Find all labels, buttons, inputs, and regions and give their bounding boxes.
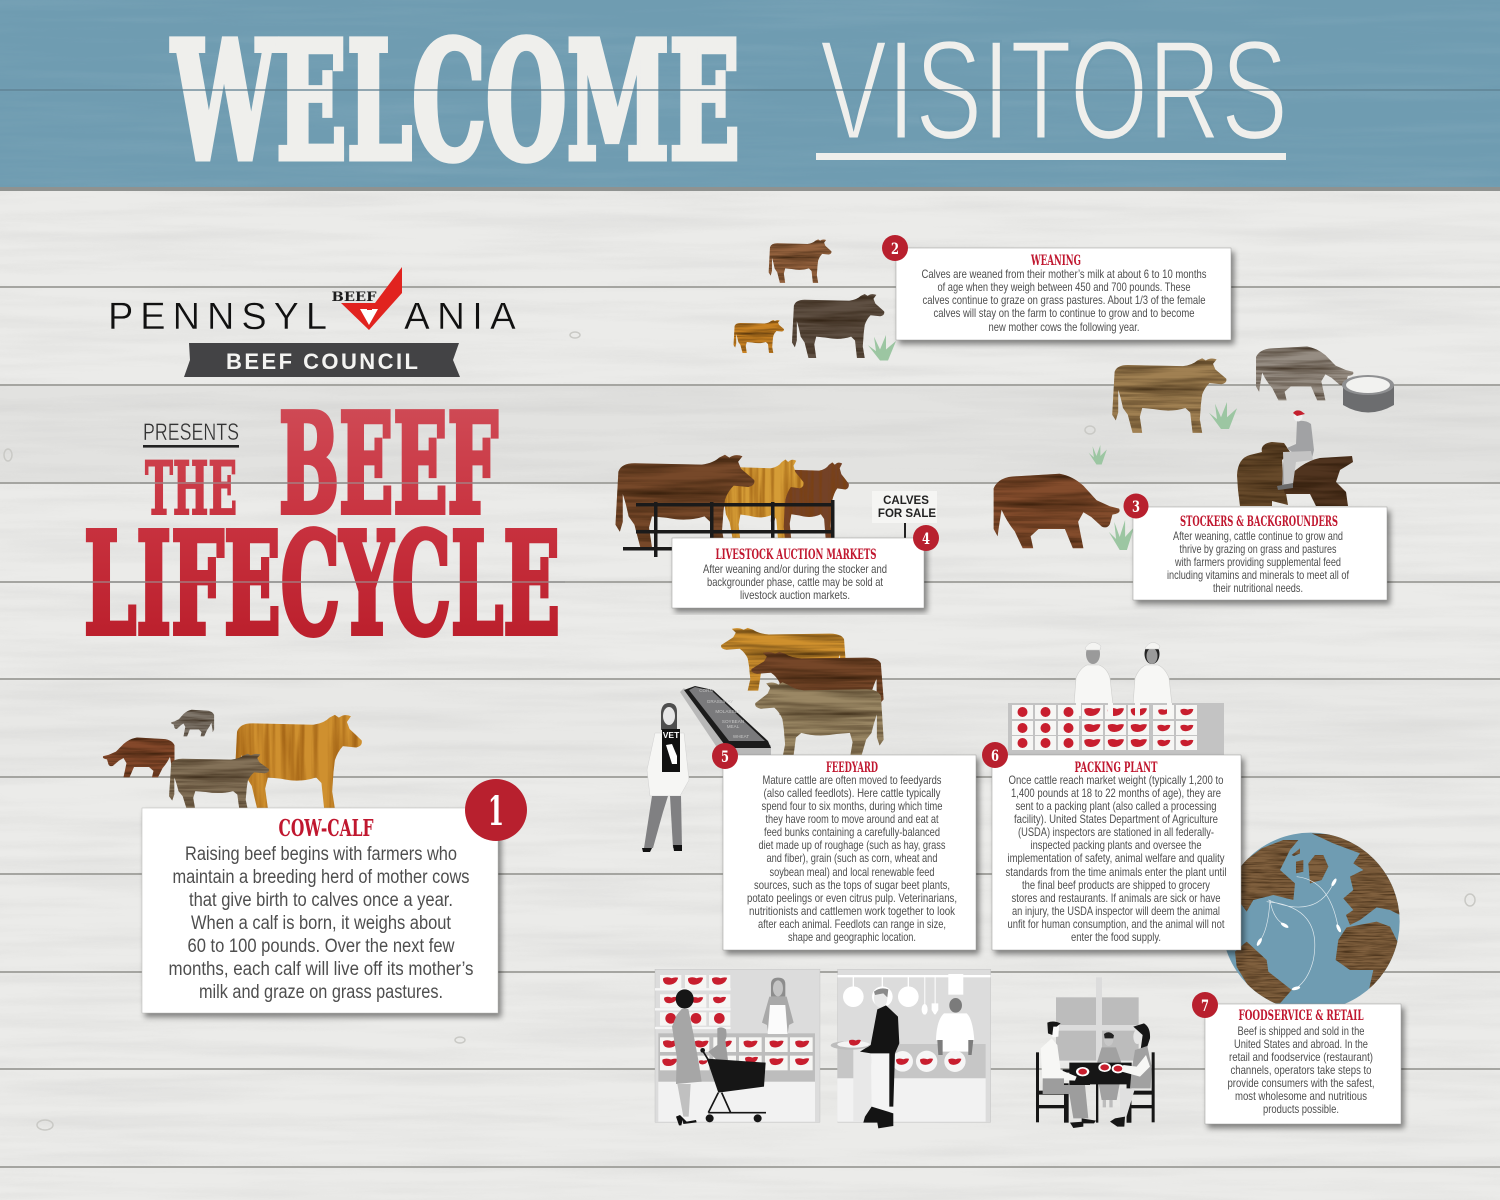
cow: big brown <box>615 455 754 547</box>
text: packing plant: inspected packing plants and oversee the <box>1030 839 1202 852</box>
text: feedyard: shape and geographic location. <box>788 931 916 944</box>
window <box>1056 977 1139 1061</box>
text: cow-calf: that give birth to calves once a year. <box>189 890 453 911</box>
text: packing plant <box>1006 774 1226 944</box>
text: Presents: PRESENTS <box>143 419 239 446</box>
panel: packing plant <box>992 755 1241 950</box>
text: stockers: including vitamins and minerals to meet all of <box>1167 569 1350 582</box>
beef cuts grid <box>1012 705 1197 750</box>
text: auction <box>703 563 887 602</box>
underline <box>816 153 1286 160</box>
plates <box>1076 1063 1124 1076</box>
heading: weaning: WEANING <box>1030 253 1081 269</box>
heading: LIFECYCLE: LIFECYCLE <box>84 503 560 667</box>
panel: weaning <box>896 248 1231 340</box>
text: cow-calf: maintain a breeding herd of mother cows <box>172 867 470 888</box>
text: feedyard: after each animal. Feedlots can range in size, <box>758 918 946 931</box>
steak cards <box>660 975 813 1070</box>
number badge 6 <box>982 742 1008 768</box>
icon: red beef check mark <box>332 267 402 330</box>
cattle group: feedyard <box>642 628 884 852</box>
text: foodservice: products possible. <box>1263 1103 1339 1116</box>
blue header band <box>0 0 1500 191</box>
number badge 4 <box>913 525 939 551</box>
text: cow-calf: 60 to 100 pounds. Over the next few <box>188 936 455 957</box>
logo wordmark left: PENNSYL <box>108 296 334 338</box>
number badge 1 <box>465 779 527 841</box>
mother <box>1110 1023 1152 1127</box>
cow: brown <box>751 652 884 715</box>
chef <box>936 974 974 1055</box>
cow: gray small <box>171 710 214 736</box>
cow: red-brown grazing <box>103 738 174 777</box>
cow: light orange <box>718 460 804 542</box>
text: weaning: of age when they weigh between 450 and 700 pounds. These <box>938 281 1190 294</box>
text: packing plant: an injury, the USDA inspector will deem the animal <box>1012 905 1220 918</box>
icon: grass tufts <box>1089 402 1237 464</box>
text: feedyard: they have room to move around and eat at <box>766 813 939 826</box>
number badge 7 <box>1192 992 1218 1018</box>
panel background <box>838 969 991 1122</box>
number badge 4: 4 <box>922 529 930 548</box>
text: cow-calf <box>168 844 474 1003</box>
text: feedyard: potato peelings or even citrus pulp. Veterinarians, <box>747 892 957 905</box>
panel: stockers and backgrounders <box>1133 507 1387 600</box>
feed bunk: WHEAT <box>733 734 749 739</box>
packing plant scene <box>1008 642 1224 755</box>
child in cart <box>708 1027 728 1060</box>
text: stockers: thrive by grazing on grass and pastures <box>1180 543 1337 556</box>
feed bunk: SOYBEAN <box>722 719 744 724</box>
heading: packing plant: PACKING PLANT <box>1074 760 1158 776</box>
icon: grass <box>1109 520 1134 550</box>
text: weaning: calves continue to graze on grass pastures. About 1/3 of the female <box>922 294 1206 307</box>
text: feedyard: and fiber), grain (such as corn, wheat and <box>766 852 938 865</box>
dining family scene <box>1036 977 1155 1128</box>
feed bunk: MEAL <box>727 724 740 729</box>
text: packing plant: sent to a packing plant (also called a processing <box>1016 800 1216 813</box>
cow: driftwood <box>755 682 884 758</box>
feed bunk <box>680 686 771 755</box>
heading: stockers: STOCKERS & BACKGROUNDERS <box>1180 514 1338 530</box>
text: packing plant: standards from the time animals enter the plant until <box>1006 866 1226 879</box>
text: foodservice: retail and foodservice (restaurant) <box>1229 1051 1373 1064</box>
number badge 1: 1 <box>488 788 504 835</box>
veterinarian: VET <box>663 730 680 740</box>
child <box>1097 1032 1121 1107</box>
shopper <box>672 989 702 1125</box>
sign: calves for sale: FOR SALE <box>878 508 936 520</box>
text: packing plant: (USDA) inspectors are stationed in all federally- <box>1018 826 1214 839</box>
chairs <box>1036 1052 1155 1123</box>
number badge 3: 3 <box>1132 497 1140 516</box>
number badge 7: 7 <box>1201 996 1209 1015</box>
text: cow-calf: Raising beef begins with farmers who <box>185 844 457 865</box>
ribbon: Beef Council <box>184 343 460 377</box>
shopping cart <box>700 1048 766 1122</box>
text: cow-calf: milk and graze on grass pastures. <box>199 982 443 1003</box>
text: feedyard: sources, such as the tops of sugar beet plants, <box>754 879 950 892</box>
veterinarian <box>642 703 689 852</box>
heading: feedyard: FEEDYARD <box>826 760 878 776</box>
text: feedyard: feed bunks containing a carefully-balanced <box>764 826 940 839</box>
panel: feedyard <box>723 755 976 950</box>
text: auction: livestock auction markets. <box>740 589 850 602</box>
text: feedyard: (also called feedlots). Here cattle typically <box>764 787 941 800</box>
panel background <box>655 969 820 1122</box>
text: foodservice: Beef is shipped and sold in the <box>1238 1025 1364 1038</box>
number badge 2: 2 <box>891 239 899 258</box>
feed bunk: MOLASSES <box>715 709 741 714</box>
ribbon: Beef Council: BEEF COUNCIL <box>226 349 418 374</box>
restaurant kitchen scene <box>831 969 991 1128</box>
shipping markers <box>1256 878 1342 991</box>
text: auction: After weaning and/or during the stocker and <box>703 563 887 576</box>
text: weaning: new mother cows the following year. <box>988 321 1140 334</box>
retail scene <box>655 969 820 1125</box>
text: packing plant: implementation of safety, animal welfare and quality <box>1008 852 1225 865</box>
text: foodservice <box>1228 1025 1374 1116</box>
pots and utensils <box>838 975 991 1015</box>
text: packing plant: 1,400 pounds at 18 to 22 months of age), they are <box>1011 787 1221 800</box>
text: packing plant: enter the food supply. <box>1071 931 1161 944</box>
text: foodservice: provide consumers with the safest, <box>1228 1077 1374 1090</box>
feed bunk: GRASS/HAY <box>707 699 733 704</box>
cattle group: stockers <box>994 346 1394 550</box>
text: stockers: their nutritional needs. <box>1213 582 1303 595</box>
text: packing plant: unfit for human consumption, and the animal will not <box>1008 918 1225 931</box>
text: packing plant: the final beef products are shipped to grocery <box>1022 879 1210 892</box>
cattle group: cow-calf <box>103 710 362 810</box>
globe <box>1222 833 1403 1011</box>
cow: orange <box>721 628 847 691</box>
cow: gray grazing <box>1256 346 1353 400</box>
atv with rancher <box>1237 410 1353 506</box>
cutting table <box>1008 703 1224 755</box>
sign: calves for sale <box>872 491 937 539</box>
cow: dark brown <box>771 462 849 540</box>
heading: auction: LIVESTOCK AUCTION MARKETS <box>716 547 876 563</box>
icon: red beef check mark: BEEF <box>332 290 377 305</box>
text: packing plant: facility). United States Department of Agriculture <box>1014 813 1218 826</box>
number badge 3 <box>1124 494 1148 518</box>
title: Welcome Visitors <box>0 7 1500 197</box>
text: stockers: with farmers providing supplemental feed <box>1174 556 1341 569</box>
plated steaks <box>892 1051 966 1072</box>
cattle group: weaning <box>734 239 896 360</box>
text: stockers <box>1167 530 1350 595</box>
text: foodservice: channels, operators take steps to <box>1230 1064 1372 1077</box>
text: packing plant: Once cattle reach market weight (typically 1,200 to <box>1008 774 1224 787</box>
heading: WELCOME: WELCOME <box>171 7 740 197</box>
cow: orange standing <box>234 715 362 809</box>
heading: BEEF: BEEF <box>279 384 498 545</box>
panel: cow-calf <box>142 808 498 1013</box>
text: weaning <box>922 268 1207 334</box>
text: feedyard: spend four to six months, during which time <box>762 800 942 813</box>
text: feedyard <box>747 774 957 944</box>
text: stockers: After weaning, cattle continue to grow and <box>1173 530 1343 543</box>
panel: livestock auction markets <box>672 538 924 608</box>
title: The Beef Lifecycle <box>80 384 565 667</box>
cow: brown grazing <box>994 474 1120 548</box>
cow: tan <box>1112 358 1226 433</box>
number badge 5 <box>712 743 738 769</box>
waiter <box>831 988 899 1128</box>
continents <box>1233 833 1403 1003</box>
cow: dark brown <box>792 294 884 358</box>
text: cow-calf: When a calf is born, it weighs about <box>191 913 452 934</box>
panel: foodservice and retail <box>1205 1004 1401 1124</box>
logo: Pennsylvania Beef Council <box>108 267 523 377</box>
text: auction: backgrounder phase, cattle may be sold at <box>707 576 884 589</box>
icon: grass <box>868 335 896 360</box>
heading: VISITORS: VISITORS <box>820 11 1288 170</box>
number badge 6: 6 <box>991 746 999 765</box>
text: feedyard: Mature cattle are often moved to feedyards <box>762 774 942 787</box>
fence <box>623 500 834 557</box>
text: weaning: calves will stay on the farm to continue to grow and to become <box>934 307 1194 320</box>
logo wordmark right: ANIA <box>404 296 523 338</box>
sign: calves for sale: CALVES <box>883 495 929 507</box>
text: feedyard: soybean meal) and local renewable feed <box>770 866 934 879</box>
table <box>1063 1063 1132 1123</box>
text: feedyard: nutritionists and cattlemen work together to look <box>749 905 955 918</box>
text: foodservice: United States and abroad. In the <box>1234 1038 1368 1051</box>
text: foodservice: most wholesome and nutritious <box>1235 1090 1367 1103</box>
text: packing plant: stores and restaurants. If animals are sick or have <box>1012 892 1220 905</box>
icon: water trough <box>1342 375 1394 412</box>
calf: driftwood <box>169 754 269 810</box>
butcher <box>762 978 794 1034</box>
number badge 2 <box>882 235 908 261</box>
shipping routes <box>1259 877 1338 988</box>
heading: cow-calf: COW-CALF <box>278 815 374 842</box>
worker arms <box>1076 703 1172 716</box>
father <box>1041 1021 1096 1128</box>
text: cow-calf: months, each calf will live off its mother’s <box>168 959 474 980</box>
cow: brown <box>769 239 831 283</box>
heading: foodservice: FOODSERVICE & RETAIL <box>1238 1008 1364 1024</box>
feed bunk: CORN <box>699 688 713 693</box>
text: weaning: Calves are weaned from their mother’s milk at about 6 to 10 months <box>922 268 1207 281</box>
text: feedyard: diet made up of roughage (such as hay, grass <box>758 839 946 852</box>
number badge 5: 5 <box>721 747 729 766</box>
heading: THE: THE <box>145 446 237 532</box>
cattle group: auction <box>615 455 937 557</box>
calf: orange <box>734 320 784 353</box>
workers <box>1074 642 1172 705</box>
